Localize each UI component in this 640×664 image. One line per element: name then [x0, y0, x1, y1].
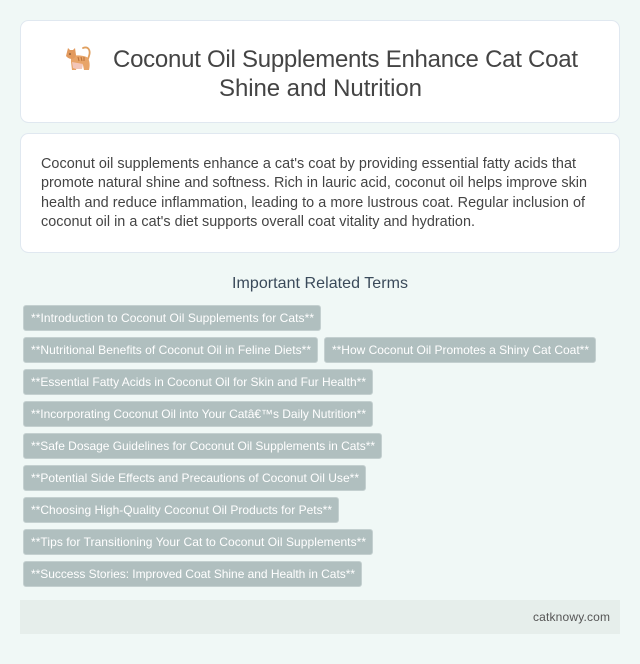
footer: catknowy.com	[533, 610, 610, 624]
heading: related terms: Important Related Terms	[232, 275, 408, 292]
chip: high quality	[24, 498, 338, 522]
title: Coconut Oil Supplements Enhance Cat Coat	[113, 46, 578, 73]
text block: description: Coconut oil supplements enhance a cat's coat by providing essential fatty acids that	[41, 156, 576, 172]
chip: transition tips: **Tips for Transitioning Your Cat to Coconut Oil Supplements**	[31, 535, 366, 549]
chip: side effects	[24, 466, 366, 490]
chip: fatty acids	[24, 370, 372, 394]
text block: description: health and reduce inflammation, leading to a more lustrous coat. Regular inclusion of	[41, 195, 586, 211]
chip: fatty acids: **Essential Fatty Acids in Coconut Oil for Skin and Fur Health**	[31, 375, 366, 389]
chip: shiny coat	[324, 338, 596, 362]
chip: nutritional benefits	[24, 338, 318, 362]
chip: daily nutrition: **Incorporating Coconut Oil into Your Catâ€™s Daily Nutrition**	[31, 407, 366, 421]
chip: shiny coat: **How Coconut Oil Promotes a Shiny Cat Coat**	[332, 343, 589, 357]
text block: description: promote natural shine and softness. Rich in lauric acid, coconut oil helps improve skin	[41, 175, 587, 191]
chip: side effects: **Potential Side Effects and Precautions of Coconut Oil Use**	[31, 471, 359, 485]
footer	[20, 600, 620, 634]
chip: success stories: **Success Stories: Improved Coat Shine and Health in Cats**	[31, 567, 355, 581]
chip: success stories	[24, 562, 362, 586]
chip: introduction: **Introduction to Coconut Oil Supplements for Cats**	[31, 311, 314, 325]
chip: dosage: **Safe Dosage Guidelines for Coconut Oil Supplements in Cats**	[31, 439, 375, 453]
chip: high quality: **Choosing High-Quality Coconut Oil Products for Pets**	[31, 503, 332, 517]
panel: description	[20, 134, 620, 252]
chip: transition tips	[24, 530, 372, 554]
panel: title card	[20, 20, 620, 122]
chip: dosage	[24, 434, 382, 458]
text block: description: coconut oil in a cat's diet supports overall coat vitality and hydration.	[41, 214, 475, 230]
title: Shine and Nutrition	[219, 75, 422, 102]
chip: nutritional benefits: **Nutritional Benefits of Coconut Oil in Feline Diets**	[31, 343, 311, 357]
icon: cat	[66, 47, 90, 70]
panel: term chips	[24, 306, 596, 586]
chip: introduction	[24, 306, 320, 330]
text block: description	[41, 156, 587, 230]
chip: daily nutrition	[24, 402, 372, 426]
title	[113, 46, 578, 102]
